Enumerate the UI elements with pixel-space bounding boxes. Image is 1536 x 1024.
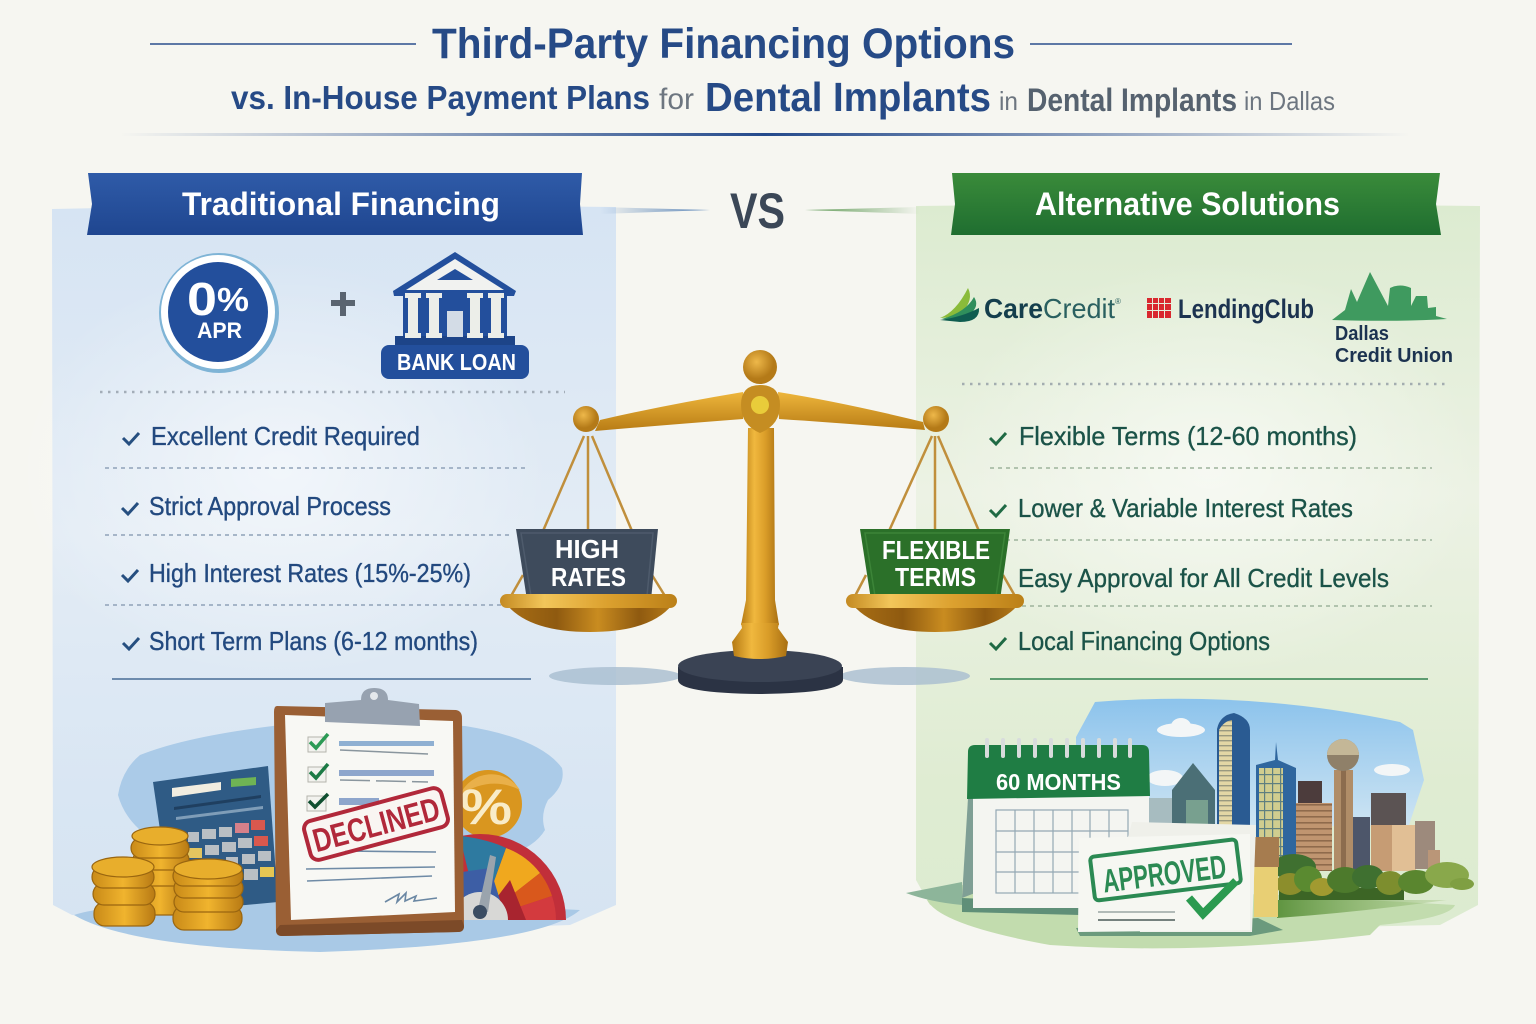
list: traditional financing drawbacks [122, 421, 478, 656]
item: flexible terms: Flexible Terms (12-60 months) [1019, 421, 1357, 451]
approval card [1078, 834, 1250, 932]
logo: LendingClub: LendingClub [1178, 294, 1314, 324]
logo: CareCredit: ® [1115, 297, 1121, 306]
subtitle [231, 74, 1335, 120]
illustration: declined application [74, 688, 580, 952]
approved stamp [1090, 839, 1241, 901]
scale collar [732, 623, 788, 659]
panel: alternative solutions background [916, 203, 1480, 930]
watercolor blob [118, 724, 563, 860]
brown building behind folder [1254, 837, 1279, 867]
logo: Dallas Credit Union: Dallas [1335, 323, 1389, 345]
left sign: high rates: HIGH [555, 534, 619, 564]
scale pole [741, 428, 779, 625]
icon: 0% APR badge: % [217, 281, 249, 318]
subtitle: in [999, 86, 1018, 116]
declined stamp: DECLINED [309, 790, 444, 859]
banner: Alternative Solutions: Alternative Solutions [1035, 186, 1340, 222]
bank body [403, 294, 507, 342]
paper [285, 715, 455, 920]
title: Third-Party Financing Options [432, 20, 1015, 68]
item: local financing: Local Financing Options [1018, 626, 1270, 656]
subtitle: Dental Implants [705, 74, 991, 120]
calendar rings [987, 740, 1130, 756]
form lines [306, 851, 436, 881]
item: lower rates: Lower & Variable Interest Rates [1018, 493, 1353, 523]
coin stack: left [92, 857, 155, 926]
coin stack: right [173, 859, 243, 930]
coin stack: middle [131, 827, 189, 915]
clipboard [274, 688, 464, 936]
calendar: 60 MONTHS [996, 769, 1121, 795]
card lines [1098, 911, 1175, 913]
VS text: VS [730, 183, 785, 239]
right streak [805, 207, 920, 214]
percent coin: % [460, 779, 512, 835]
clip [325, 688, 420, 726]
signature [385, 893, 437, 902]
title block [120, 20, 1410, 136]
item: strict approval: Strict Approval Process [149, 491, 391, 521]
banner: Traditional Financing: Traditional Financing [182, 186, 500, 222]
subtitle: in Dallas [1244, 86, 1335, 116]
top ball [743, 350, 777, 384]
icon: bank loan [381, 252, 529, 379]
yellow folder tab [1254, 867, 1278, 917]
divider: left logos [100, 391, 565, 393]
approved stamp: APPROVED [1101, 848, 1228, 900]
icon: bank loan: BANK LOAN [397, 349, 516, 375]
left ground shadow [906, 882, 962, 905]
bank roof [393, 252, 516, 296]
panel: traditional financing background [10, 204, 616, 935]
scales shadow left [549, 667, 681, 685]
skyline buildings [1149, 713, 1440, 872]
icon: plus sign [331, 292, 355, 316]
bank door [447, 311, 463, 337]
logo: CareCredit [940, 288, 1121, 324]
logo: Dallas Credit Union: Credit Union [1335, 345, 1453, 367]
left streak [600, 207, 710, 214]
title rule right [1030, 43, 1292, 45]
care credit leaf [940, 288, 979, 322]
calendar [962, 740, 1150, 908]
calculator [153, 766, 278, 912]
icon: 0% APR badge: APR [197, 318, 242, 343]
right sign: flexible terms: FLEXIBLE [882, 535, 990, 565]
subtitle: Dental Implants [1027, 82, 1237, 118]
risk gauge [463, 834, 566, 920]
title underline [120, 133, 1410, 136]
VS badge [600, 183, 920, 239]
list: alternative solutions benefits [990, 421, 1389, 656]
calendar base shadow [962, 898, 1080, 915]
clouds [1147, 718, 1410, 786]
item: excellent credit: Excellent Credit Required [151, 421, 420, 451]
balance scale [500, 350, 1024, 694]
scale foot [678, 650, 843, 694]
check mark [1189, 881, 1236, 914]
left sign: high rates [516, 529, 658, 600]
folder back [1128, 822, 1256, 932]
sky [1076, 699, 1424, 830]
calendar grid [996, 810, 1128, 893]
banner: Alternative Solutions [951, 173, 1441, 235]
banner: Traditional Financing [87, 173, 583, 235]
logo: CareCredit: Care [984, 293, 1043, 324]
item: easy approval: Easy Approval for All Credit Levels [1018, 563, 1389, 593]
item: short term: Short Term Plans (6-12 months) [149, 626, 478, 656]
item: high interest: High Interest Rates (15%-25%) [149, 558, 471, 588]
icon: 0% APR badge [159, 253, 279, 373]
illustration: approved financing with Dallas skyline [906, 699, 1474, 948]
trees [1272, 854, 1474, 918]
right sign: flexible terms: TERMS [895, 562, 976, 592]
left sign: high rates: RATES [551, 562, 626, 592]
bank columns [405, 293, 504, 338]
right pan [846, 594, 1024, 632]
bank loan label [381, 345, 529, 379]
left pan [500, 594, 677, 632]
logo: Dallas Credit Union [1332, 272, 1453, 367]
subtitle: vs. In-House Payment Plans [231, 79, 650, 116]
right sign: flexible terms [860, 529, 1010, 600]
subtitle: for [659, 83, 694, 116]
beam end balls [573, 406, 599, 432]
ground shadow [74, 897, 580, 952]
scale beam [595, 392, 743, 431]
ground wash [927, 885, 1455, 948]
envelope shadow [1076, 918, 1283, 936]
icon: 0% APR badge: 0 [187, 273, 217, 325]
checkbox rows [307, 734, 434, 811]
right chains [855, 436, 1015, 596]
title rule left [150, 43, 416, 45]
logo: LendingClub [1147, 294, 1314, 324]
beam pivot [741, 385, 780, 433]
percent coin [454, 770, 522, 838]
scales shadow right [840, 667, 970, 685]
left chains [511, 436, 665, 596]
logo: CareCredit: Credit [1043, 293, 1115, 324]
divider: right logos [962, 383, 1445, 385]
